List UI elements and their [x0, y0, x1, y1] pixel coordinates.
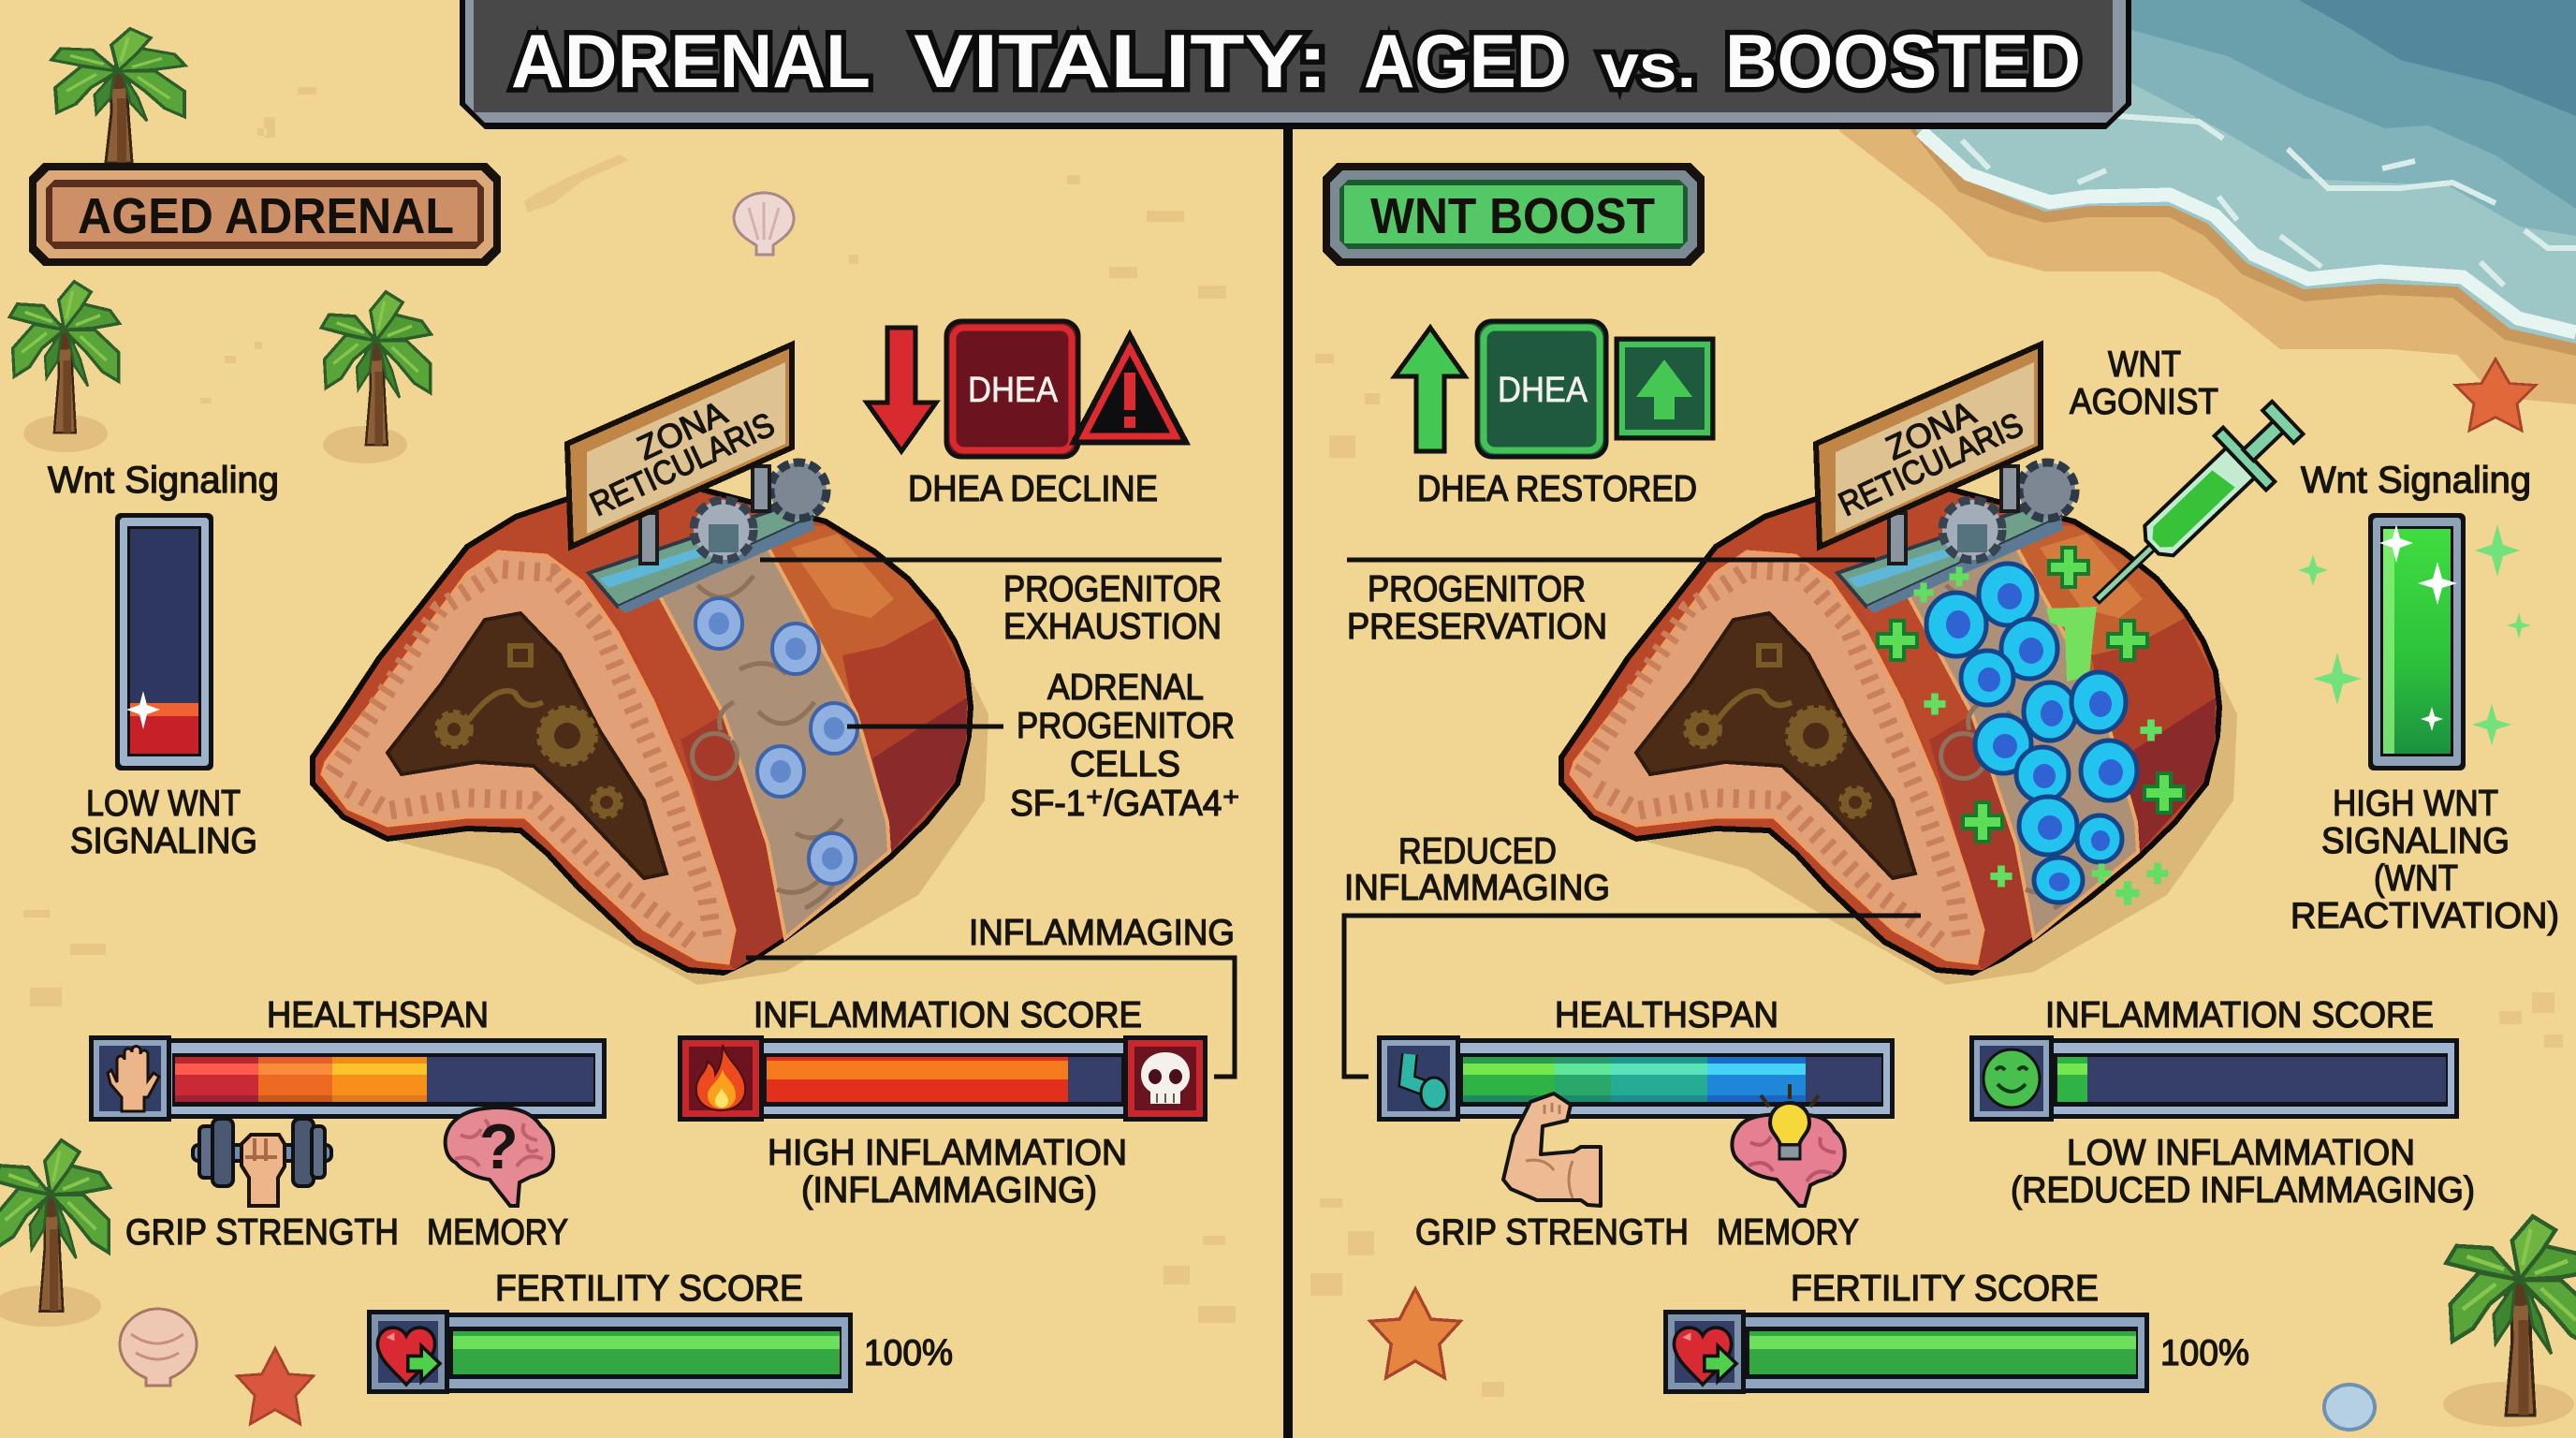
heading: wnt boost: WNT BOOST: [1370, 188, 1655, 244]
icon: flexed arm: [1503, 1093, 1601, 1206]
palm tree top left: [51, 29, 185, 162]
label: low inflammation: LOW INFLAMMATION: [2067, 1133, 2415, 1173]
caption: SIGNALING: [70, 821, 257, 861]
label: high inflammation: [768, 1133, 1127, 1211]
caption: [2291, 784, 2559, 936]
label: wnt agonist: AGONIST: [2070, 382, 2218, 422]
label: HEALTHSPAN: [1555, 995, 1778, 1035]
gauge: [115, 513, 213, 770]
icon: small up arrow box: [1617, 339, 1713, 438]
icon: hand: [89, 1035, 171, 1122]
icon: skull: [1123, 1035, 1208, 1122]
callout: reduced inflammaging: INFLAMMAGING: [1344, 868, 1610, 908]
bar: [367, 1310, 853, 1394]
bar: [1663, 1310, 2149, 1394]
callout: progenitor preservation: PRESERVATION: [1347, 607, 1607, 647]
left healthspan bar: [89, 995, 607, 1122]
fill segments: [1463, 1057, 1806, 1102]
right adrenal gland: [1561, 0, 2237, 985]
label: memory: MEMORY: [427, 1212, 568, 1253]
label: DHEA DECLINE: [908, 469, 1158, 509]
label: Wnt Signaling: [2301, 460, 2531, 501]
heading: wnt boost: [1323, 163, 1705, 266]
callout: progenitor exhaustion: PROGENITOR: [1003, 569, 1222, 609]
right inflammation score bar: [1969, 995, 2459, 1122]
palm tree left 1: [9, 282, 120, 452]
right wnt signaling gauge: [2291, 460, 2559, 936]
palm tree bottom right: [2443, 1216, 2576, 1427]
title text: ADRENAL: [511, 20, 871, 104]
callout: adrenal progenitor cells: [847, 668, 1240, 824]
green plus signs: [1878, 548, 2184, 842]
callout: adrenal progenitor cells: ADRENAL: [1047, 668, 1204, 708]
starfish bottom center: [1370, 1289, 1460, 1378]
label: low inflammation: (REDUCED INFLAMMAGING): [2011, 1170, 2475, 1211]
icon: heart with arrow: [1674, 1328, 1736, 1385]
caption: HIGH WNT: [2333, 784, 2498, 824]
sparkles: [2298, 524, 2531, 745]
ocean: [1839, 0, 2576, 404]
label: FERTILITY SCORE: [1791, 1269, 2099, 1309]
label: low inflammation: [2011, 1133, 2475, 1211]
label: INFLAMMATION SCORE: [754, 995, 1142, 1035]
fill: [2057, 1057, 2087, 1102]
icon: dumbbell with fist: [193, 1119, 331, 1206]
icon: smiley: [1969, 1035, 2054, 1122]
title text: vs.: [1601, 31, 1696, 100]
icon: green up arrow: [1395, 328, 1465, 451]
label: high inflammation: HIGH INFLAMMATION: [768, 1133, 1127, 1173]
sign text: ZONA: [631, 393, 732, 467]
label: DHEA RESTORED: [1417, 469, 1697, 509]
value: 100%: [2160, 1333, 2249, 1373]
label: memory: MEMORY: [1717, 1212, 1859, 1253]
icon: syringe: [2071, 390, 2314, 627]
label: INFLAMMATION SCORE: [2045, 995, 2434, 1035]
title text: VITALITY:: [914, 20, 1327, 104]
wet sand band: [1839, 0, 2576, 404]
left adrenal gland: [313, 0, 988, 985]
left wnt signaling gauge: [48, 460, 279, 861]
right healthspan bar: [1377, 995, 1895, 1122]
label: FERTILITY SCORE: [495, 1269, 803, 1309]
caption: SIGNALING: [2321, 821, 2510, 861]
title text: AGED: [1364, 20, 1567, 104]
shell top: [734, 193, 794, 255]
icon: brain with question mark: [446, 1108, 553, 1206]
small plus signs: [1913, 567, 2169, 905]
callout: reduced inflammaging: [1344, 831, 1921, 1077]
icon: DHEA green box: [1477, 321, 1606, 457]
callout: progenitor exhaustion: [760, 560, 1222, 647]
title text: [511, 20, 2081, 104]
starfish top right: [2455, 360, 2536, 431]
DHEA decline group: [867, 321, 1187, 509]
callout: adrenal progenitor cells: PROGENITOR: [1017, 706, 1235, 746]
starfish bottom left: [237, 1348, 314, 1424]
icon: brain with light bulb: [1732, 1084, 1845, 1206]
palm tree left 2: [321, 292, 432, 463]
callout: adrenal progenitor cells: SF-1⁺/GATA4⁺: [1010, 784, 1240, 824]
palm tree bottom left: [0, 1140, 110, 1327]
caption: (WNT: [2374, 858, 2458, 899]
center divider: [1283, 122, 1293, 1438]
icon: red down arrow: [867, 328, 936, 451]
title banner: [460, 0, 2131, 129]
title text: BOOSTED: [1725, 20, 2081, 104]
label: wnt agonist: WNT: [2108, 345, 2181, 385]
fill segments: [175, 1057, 427, 1102]
label: HEALTHSPAN: [267, 995, 489, 1035]
callout: inflammaging: [746, 913, 1235, 1077]
icon: brain with question mark: ?: [479, 1111, 519, 1182]
value: 100%: [864, 1333, 953, 1373]
icon: warning triangle: [1073, 334, 1187, 443]
heading: aged adrenal: AGED ADRENAL: [78, 188, 454, 244]
icon: teal molecule: [1377, 1035, 1460, 1122]
callout: progenitor preservation: [1347, 560, 1875, 647]
sign text: RETICULARIS: [1833, 404, 2028, 523]
label: grip strength: GRIP STRENGTH: [125, 1212, 399, 1253]
right fertility score: [1663, 1269, 2249, 1394]
icon: DHEA red box: [946, 321, 1078, 457]
caption: LOW WNT: [86, 784, 241, 824]
icon: DHEA green box: DHEA: [1498, 371, 1588, 410]
sign text: RETICULARIS: [584, 404, 780, 523]
label: grip strength: GRIP STRENGTH: [1415, 1212, 1689, 1253]
icon: flame: [678, 1035, 764, 1122]
label: high inflammation: (INFLAMMAGING): [801, 1170, 1097, 1211]
sign text: ZONA: [1880, 393, 1981, 467]
left inflammation score bar: [678, 995, 1208, 1122]
caption: REACTIVATION): [2291, 896, 2559, 936]
progenitor cells aged: [695, 598, 857, 884]
shell bottom left: [120, 1309, 197, 1386]
caption: [70, 784, 257, 861]
icon: DHEA red box: DHEA: [968, 371, 1059, 410]
DHEA restored group: [1395, 321, 1713, 509]
icon: heart with arrow: [377, 1328, 440, 1385]
blue shell: [2324, 1385, 2375, 1430]
callout: reduced inflammaging: REDUCED: [1398, 831, 1557, 872]
callout: progenitor exhaustion: EXHAUSTION: [1003, 607, 1222, 647]
left fertility score: [367, 1269, 953, 1394]
label: wnt agonist: [2070, 345, 2218, 422]
gauge: [2368, 513, 2466, 770]
glow splash: [2046, 607, 2097, 682]
callout: inflammaging: INFLAMMAGING: [969, 913, 1235, 953]
fill: [767, 1057, 1068, 1102]
label: Wnt Signaling: [48, 460, 279, 501]
heading: aged adrenal: [29, 163, 501, 266]
callout: progenitor preservation: PROGENITOR: [1368, 569, 1586, 609]
progenitor cells boosted: [1926, 564, 2137, 902]
callout: adrenal progenitor cells: CELLS: [1070, 744, 1180, 785]
